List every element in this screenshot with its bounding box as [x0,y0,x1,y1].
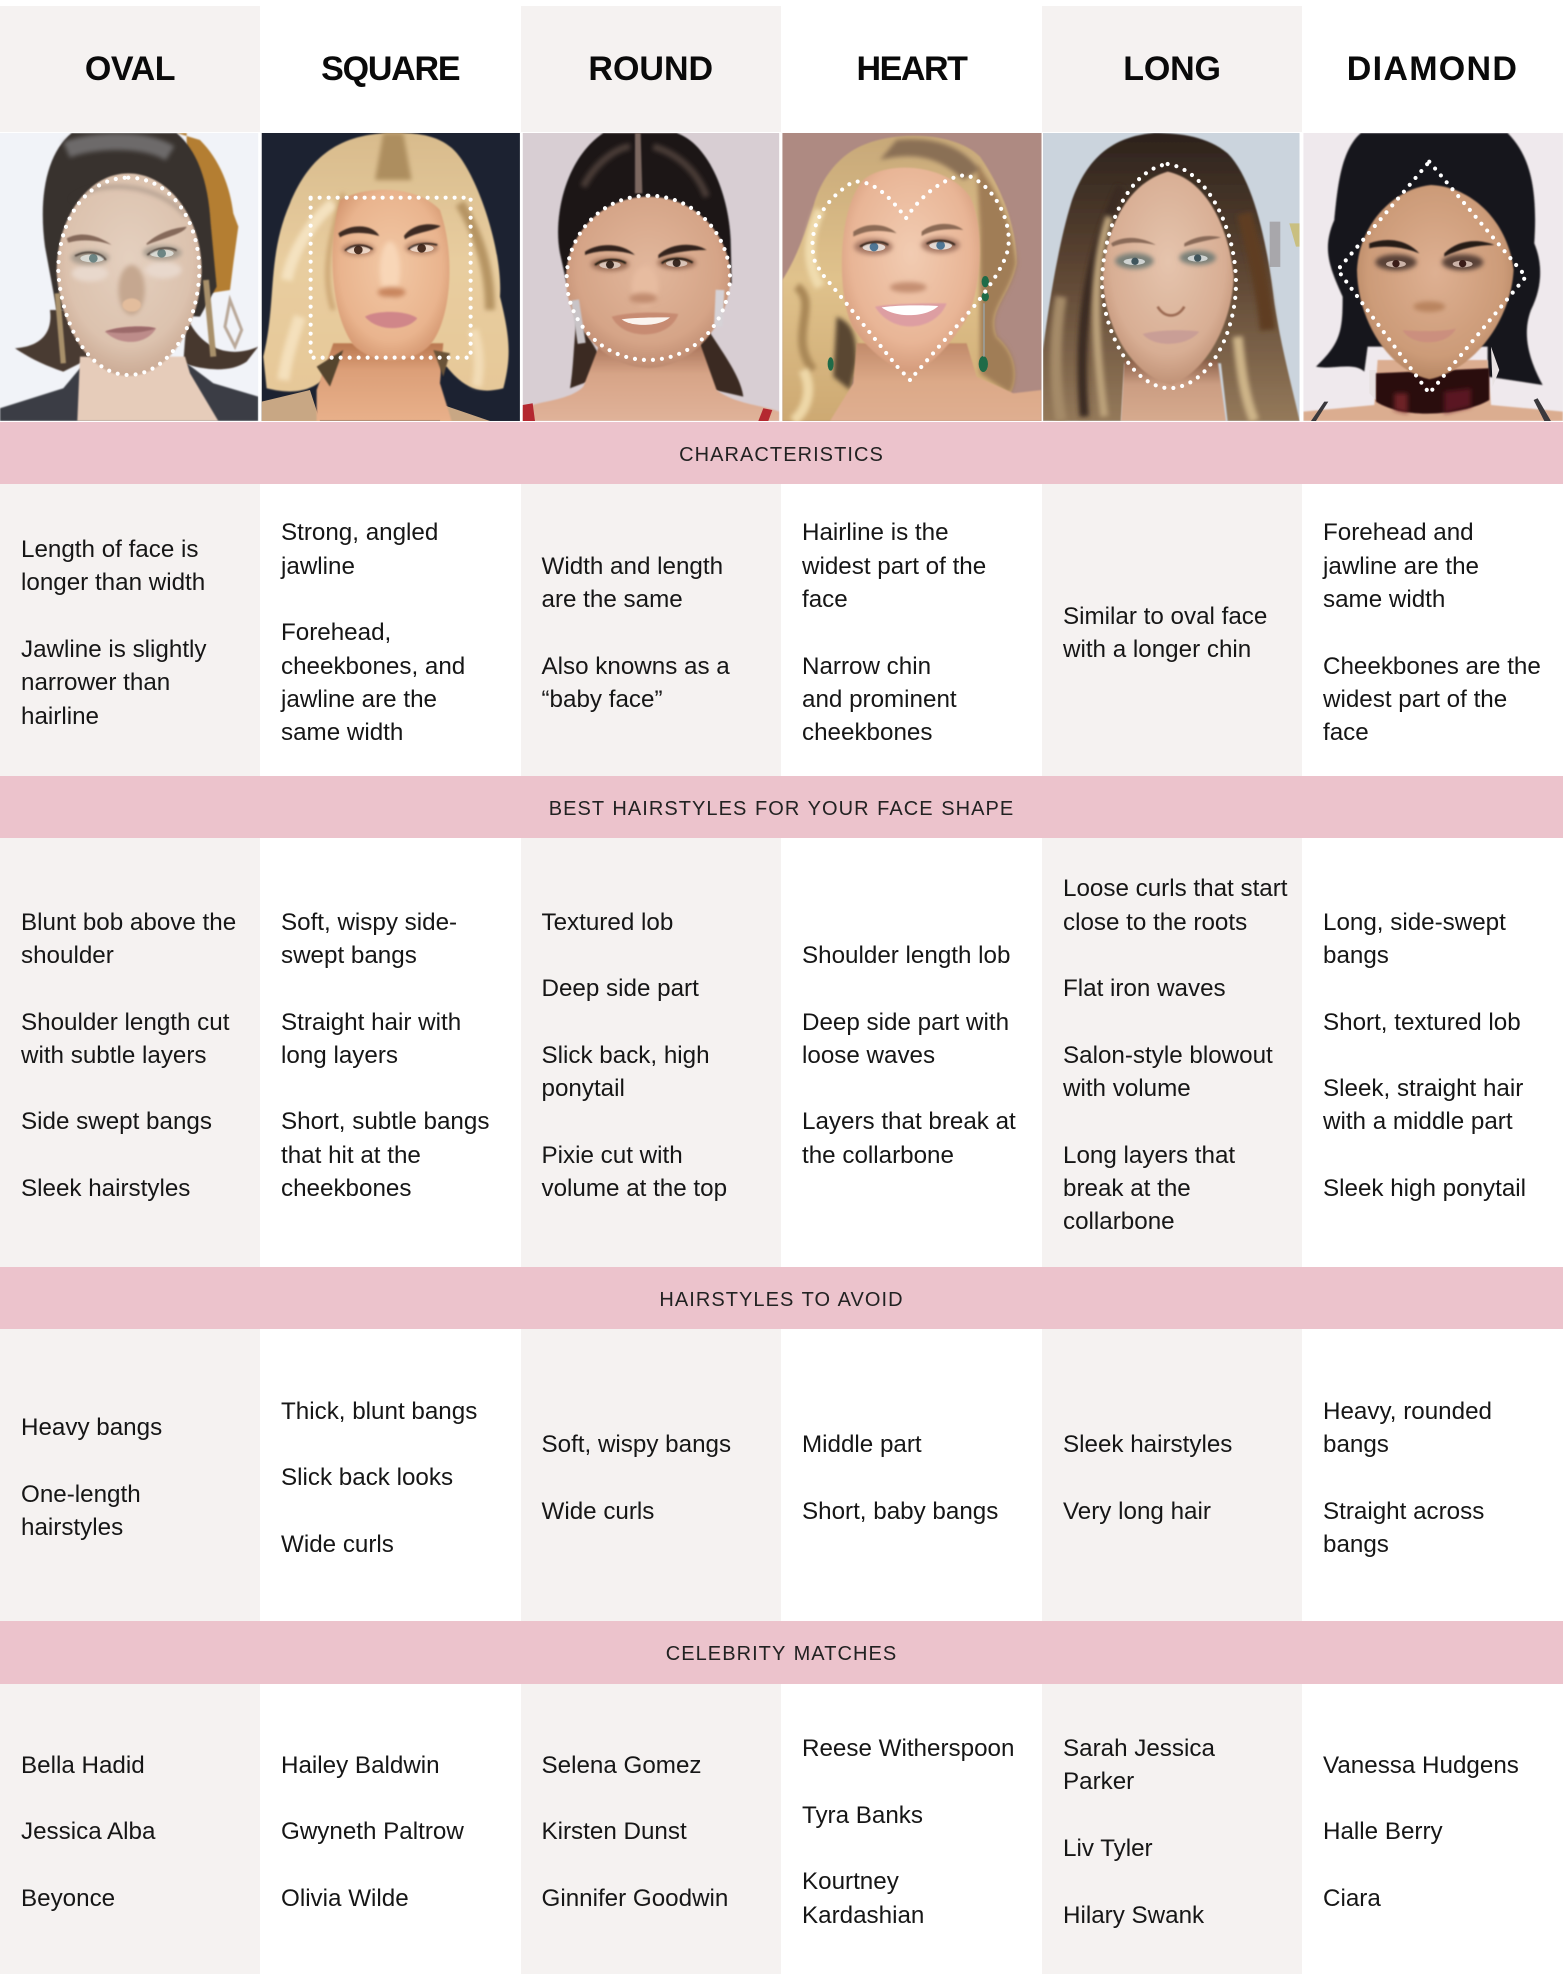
heading: round [520,6,781,132]
celebrities: diamond [1302,1684,1563,1974]
best hairstyles: round: Pixie cut with [542,1142,683,1169]
best hairstyles: heart: Deep side part with [802,1009,1009,1036]
portrait: oval [0,133,258,421]
avoid: oval: Heavy bangs [21,1414,162,1441]
best hairstyles: long: Long layers that [1063,1142,1235,1169]
band: characteristics: CHARACTERISTICS [679,444,884,466]
best hairstyles: diamond: Sleek, straight hair [1323,1075,1523,1102]
heading: diamond: DIAMOND [1347,50,1518,88]
celebrities: long: Hilary Swank [1063,1902,1204,1929]
celebrities: oval [0,1684,260,1974]
heading: round: ROUND [588,50,713,88]
avoid: long: Sleek hairstyles [1063,1431,1232,1458]
dotted outline: round [567,196,730,360]
characteristics: diamond: Cheekbones are the [1323,653,1541,680]
best hairstyles: diamond: Sleek high ponytail [1323,1175,1526,1202]
celebrities: oval: Bella Hadid [21,1752,145,1779]
celebrities: square: Gwyneth Paltrow [281,1818,464,1845]
band: hairstyles to avoid: HAIRSTYLES TO AVOID [659,1288,904,1310]
band: hairstyles to avoid [0,1267,1563,1329]
heading: oval: OVAL [85,50,175,88]
band: characteristics [0,422,1563,484]
characteristics: heart: and prominent [802,686,957,713]
best hairstyles: long: break at the [1063,1175,1191,1202]
celebrities: square: Hailey Baldwin [281,1752,440,1779]
avoid: diamond: bangs [1323,1431,1389,1458]
characteristics: square: Forehead, [281,619,391,646]
celebrities: square [260,1684,520,1974]
avoid: square: Thick, blunt bangs [281,1398,477,1425]
best hairstyles: round: ponytail [542,1075,625,1102]
best hairstyles: long: Flat iron waves [1063,975,1226,1002]
celebrities: oval: Jessica Alba [21,1818,155,1845]
celebrities: diamond: Halle Berry [1323,1818,1443,1845]
best hairstyles: square: Soft, wispy side- [281,909,457,936]
best hairstyles: square: swept bangs [281,942,417,969]
dotted outline: oval [58,178,199,375]
characteristics: square: jawline are the [281,686,437,713]
best hairstyles: heart: loose waves [802,1042,935,1069]
characteristics: heart: cheekbones [802,719,932,746]
dotted outline: square [311,198,471,358]
best hairstyles: long: collarbone [1063,1208,1175,1235]
avoid: oval: One-length [21,1481,141,1508]
best hairstyles: long: close to the roots [1063,909,1247,936]
portrait: square [262,133,520,421]
best hairstyles: square: long layers [281,1042,398,1069]
portrait: diamond [1303,133,1563,421]
dotted outline: heart [813,175,1009,380]
characteristics: diamond: face [1323,719,1369,746]
best hairstyles: square: Straight hair with [281,1009,461,1036]
characteristics: oval: narrower than [21,669,170,696]
characteristics: oval: Jawline is slightly [21,636,207,663]
characteristics: round: Also knowns as a [542,653,730,680]
characteristics: square: cheekbones, and [281,653,465,680]
best hairstyles: long: Salon-style blowout [1063,1042,1273,1069]
celebrities: heart [781,1684,1042,1974]
characteristics: long [1042,484,1302,776]
characteristics: round: are the same [542,586,683,613]
best hairstyles: square: cheekbones [281,1175,411,1202]
characteristics: diamond [1302,484,1563,776]
celebrities: oval: Beyonce [21,1885,115,1912]
celebrities: long [1042,1684,1302,1974]
avoid: heart: Short, baby bangs [802,1498,998,1525]
celebrities: heart: Kardashian [802,1902,924,1929]
characteristics: heart: Narrow chin [802,653,931,680]
avoid: diamond [1302,1329,1563,1621]
best hairstyles: oval: Side swept bangs [21,1108,212,1135]
characteristics: diamond: widest part of the [1323,686,1507,713]
avoid: oval: hairstyles [21,1514,123,1541]
characteristics: heart: face [802,586,848,613]
characteristics: heart: Hairline is the [802,519,949,546]
heading: long: LONG [1123,50,1221,88]
celebrities: long: Parker [1063,1768,1134,1795]
best hairstyles: oval: with subtle layers [21,1042,207,1069]
avoid: long: Very long hair [1063,1498,1211,1525]
avoid: heart [781,1329,1042,1621]
band: best hairstyles [0,776,1563,838]
characteristics: oval: Length of face is [21,536,198,563]
best hairstyles: diamond [1302,838,1563,1267]
portrait: round [523,133,779,421]
celebrities: round [520,1684,781,1974]
heading: diamond [1302,6,1563,132]
celebrities: long: Sarah Jessica [1063,1735,1215,1762]
best hairstyles: oval: Shoulder length cut [21,1009,229,1036]
characteristics: square [260,484,520,776]
best hairstyles: oval: shoulder [21,942,114,969]
celebrities: heart: Tyra Banks [802,1802,923,1829]
best hairstyles: diamond: bangs [1323,942,1389,969]
characteristics: diamond: Forehead and [1323,519,1474,546]
best hairstyles: long [1042,838,1302,1267]
characteristics: round: Width and length [542,553,723,580]
best hairstyles: heart: Shoulder length lob [802,942,1010,969]
avoid: round: Soft, wispy bangs [542,1431,731,1458]
avoid: heart: Middle part [802,1431,922,1458]
avoid: square [260,1329,520,1621]
best hairstyles: heart: Layers that break at [802,1108,1016,1135]
band: best hairstyles: BEST HAIRSTYLES FOR YOUR FACE SHAPE [549,798,1014,820]
best hairstyles: round: Textured lob [542,909,673,936]
avoid: diamond: bangs [1323,1531,1389,1558]
best hairstyles: heart [781,838,1042,1267]
avoid: square: Slick back looks [281,1464,453,1491]
best hairstyles: diamond: Long, side-swept [1323,909,1506,936]
heading: heart [781,6,1042,132]
characteristics: diamond: jawline are the [1323,553,1479,580]
celebrities: heart: Reese Witherspoon [802,1735,1014,1762]
best hairstyles: oval: Sleek hairstyles [21,1175,190,1202]
characteristics: oval: longer than width [21,569,205,596]
dotted outline: long [1102,164,1236,388]
heading: square [260,6,520,132]
band: celebrity matches [0,1621,1563,1684]
best hairstyles: round: volume at the top [542,1175,727,1202]
best hairstyles: square [260,838,520,1267]
avoid: oval [0,1329,260,1621]
heading: square: SQUARE [321,50,459,88]
avoid: diamond: Heavy, rounded [1323,1398,1492,1425]
characteristics: round: “baby face” [542,686,662,713]
celebrities: round: Kirsten Dunst [542,1818,687,1845]
celebrities: square: Olivia Wilde [281,1885,409,1912]
best hairstyles: long: with volume [1063,1075,1191,1102]
best hairstyles: round [520,838,781,1267]
characteristics: square: same width [281,719,403,746]
celebrities: long: Liv Tyler [1063,1835,1153,1862]
characteristics: round [520,484,781,776]
portrait: heart [782,133,1042,421]
characteristics: oval: hairline [21,703,99,730]
best hairstyles: round: Deep side part [542,975,699,1002]
characteristics: heart: widest part of the [802,553,986,580]
celebrities: diamond: Ciara [1323,1885,1381,1912]
characteristics: oval [0,484,260,776]
characteristics: heart [781,484,1042,776]
best hairstyles: long: Loose curls that start [1063,875,1288,902]
avoid: round [520,1329,781,1621]
celebrities: heart: Kourtney [802,1868,899,1895]
best hairstyles: square: that hit at the [281,1142,421,1169]
avoid: long [1042,1329,1302,1621]
best hairstyles: diamond: Short, textured lob [1323,1009,1521,1036]
heading: heart: HEART [856,50,967,88]
best hairstyles: oval: Blunt bob above the [21,909,236,936]
celebrities: round: Ginnifer Goodwin [542,1885,728,1912]
avoid: diamond: Straight across [1323,1498,1484,1525]
heading: long [1042,6,1302,132]
characteristics: long: Similar to oval face [1063,603,1267,630]
celebrities: round: Selena Gomez [542,1752,702,1779]
portrait row [0,133,1563,421]
dotted outline: diamond [1338,162,1526,393]
heading: oval [0,6,260,132]
characteristics: long: with a longer chin [1063,636,1251,663]
avoid: square: Wide curls [281,1531,394,1558]
celebrities: diamond: Vanessa Hudgens [1323,1752,1519,1779]
band: celebrity matches: CELEBRITY MATCHES [666,1643,897,1665]
characteristics: diamond: same width [1323,586,1445,613]
best hairstyles: square: Short, subtle bangs [281,1108,489,1135]
best hairstyles: diamond: with a middle part [1323,1108,1513,1135]
portrait: long [1043,133,1300,421]
characteristics: square: Strong, angled [281,519,438,546]
best hairstyles: round: Slick back, high [542,1042,710,1069]
best hairstyles: heart: the collarbone [802,1142,954,1169]
avoid: round: Wide curls [542,1498,654,1525]
characteristics: square: jawline [281,553,355,580]
best hairstyles: oval [0,838,260,1267]
